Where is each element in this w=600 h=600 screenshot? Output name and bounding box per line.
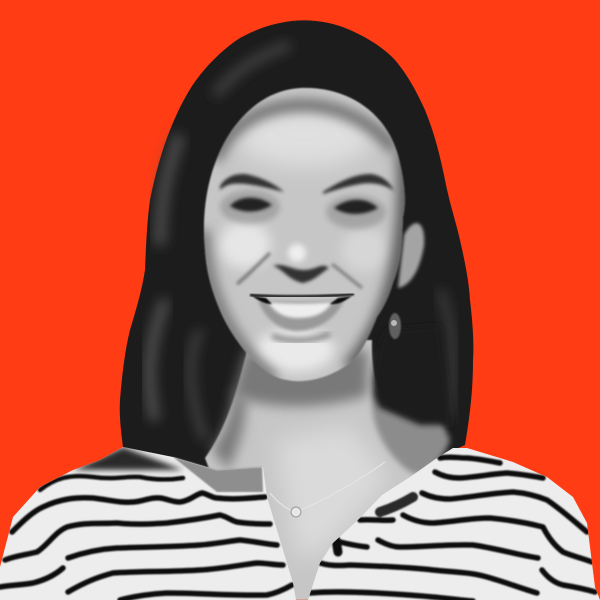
hair	[120, 20, 473, 478]
neck and chest	[205, 340, 435, 600]
shirt collar	[173, 457, 263, 492]
shoulder hair shadow	[73, 447, 183, 470]
eyebrows	[220, 174, 394, 194]
ear	[398, 223, 424, 288]
striped shirt	[0, 447, 600, 600]
face	[203, 86, 406, 382]
necklace	[270, 462, 385, 517]
nose	[237, 200, 362, 288]
earring	[389, 313, 401, 339]
eyes	[220, 190, 386, 229]
right hair lock	[372, 325, 452, 474]
mouth	[250, 294, 354, 340]
